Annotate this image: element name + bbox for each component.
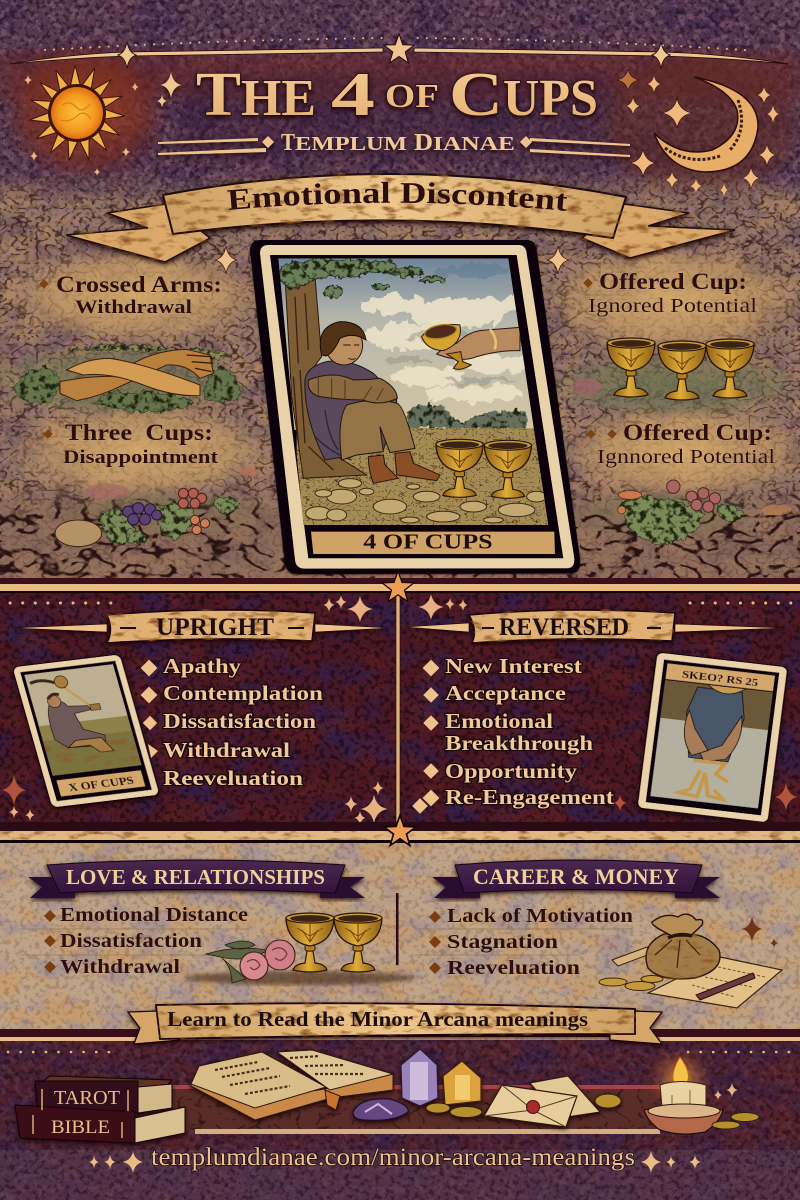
illustration: three golden cups — [607, 338, 754, 400]
main tarot card: 4 OF CUPS — [363, 531, 493, 553]
illustration: crossed arms in foliage — [13, 346, 240, 412]
subtitle: Templum Dianae: EMPLUM — [295, 133, 407, 155]
title: T — [196, 61, 241, 129]
career list: Lack of Motivation — [447, 905, 633, 927]
star and central rule — [382, 571, 414, 822]
reversed list: New Interest — [445, 654, 582, 678]
panel: tableau ground — [0, 170, 800, 582]
reversed list: Breakthrough — [445, 731, 593, 755]
love banner: LOVE & RELATIONSHIPS — [66, 865, 325, 889]
upright list: Reeveluation — [163, 766, 303, 790]
icon: coin bag, coins, letter and pen — [599, 914, 782, 1008]
career banner — [432, 860, 720, 898]
reversed list: Emotional — [445, 709, 553, 733]
icon: crystals and coins — [353, 1049, 621, 1120]
icon: cups and roses — [185, 913, 415, 985]
footer url: templumdianae.com/minor-arcana-meanings — [151, 1144, 635, 1171]
decorative sparkles near card — [215, 246, 569, 274]
reversed list: Opportunity — [445, 759, 578, 783]
panel: lower dark background — [0, 1029, 800, 1200]
icon: sealed envelope — [484, 1076, 600, 1127]
icon: sun — [24, 65, 139, 176]
panel: love and relationships — [20, 860, 415, 985]
upright list: Apathy — [163, 654, 242, 678]
upright list: Withdrawal — [163, 738, 290, 762]
upright list — [141, 654, 323, 790]
shelf with bricks — [170, 1085, 660, 1134]
text: Crossed Arms: Withdrawal — [75, 297, 192, 318]
upright list: Contemplation — [163, 681, 323, 705]
background: parchment purple — [0, 0, 800, 600]
text: Offered Cup lower — [586, 420, 776, 468]
icon: candle — [644, 1047, 759, 1134]
banner: learn to read: Learn to Read the Minor Arcana meanings — [167, 1007, 588, 1031]
small cups on card — [436, 439, 531, 498]
reversed small card: SKEO? RS 25 — [681, 668, 759, 689]
upright small card: X OF CUPS — [67, 774, 136, 794]
main tarot card — [250, 240, 580, 574]
panel: light lower section — [0, 843, 800, 1040]
text: Offered Cup top: Ignored Potential — [588, 295, 758, 317]
reversed list: Acceptance — [445, 681, 566, 705]
panel: career and money — [415, 860, 782, 1008]
text: Offered Cup lower: Ignnored Potential — [597, 446, 776, 468]
top ornamental rule — [10, 34, 788, 68]
banner: Emotional Discontent — [64, 172, 737, 268]
career list — [415, 905, 633, 979]
subtitle: Templum Dianae — [158, 130, 630, 157]
title — [157, 61, 598, 129]
icon: tarot and bible books: TAROT — [54, 1087, 120, 1109]
text: Three Cups: Disappointment — [63, 447, 219, 468]
text: Three Cups: Three Cups: — [65, 420, 213, 445]
title: C — [449, 61, 503, 129]
subtitle: Templum Dianae: IANAE — [433, 133, 515, 155]
text: Offered Cup lower: Offered Cup: — [623, 420, 772, 445]
icon: tarot and bible books: BIBLE — [51, 1117, 110, 1138]
card illustration — [273, 257, 557, 528]
star lower divider — [384, 815, 416, 846]
text: Crossed Arms — [39, 272, 222, 318]
panel: reversed — [405, 594, 797, 823]
illustration: berries right — [572, 378, 792, 545]
subtitle: Templum Dianae: D — [414, 130, 433, 156]
icon: crescent moon and stars — [617, 69, 779, 199]
upright list: Dissatisfaction — [163, 709, 316, 733]
title: UPS — [503, 70, 598, 127]
icon: open book — [191, 1050, 393, 1120]
reversed banner — [405, 610, 785, 643]
career banner: CAREER & MONEY — [473, 864, 679, 889]
panel: upright — [2, 595, 390, 825]
upright small card — [12, 654, 160, 808]
upright banner: UPRIGHT — [156, 614, 274, 641]
text: Crossed Arms: Crossed Arms: — [56, 272, 222, 297]
love list: Emotional Distance — [60, 904, 248, 926]
reversed small card — [637, 652, 788, 823]
icon: tarot and bible books — [15, 1076, 185, 1143]
upright banner — [13, 610, 390, 643]
career list: Stagnation — [447, 931, 558, 953]
section divider lower — [0, 822, 800, 843]
reversed list: Re-Engagement — [445, 785, 614, 809]
love banner — [28, 860, 365, 898]
text: Three Cups — [43, 420, 219, 468]
reversed list — [412, 654, 614, 814]
reversed banner: REVERSED — [499, 614, 629, 641]
panel: maroon background — [0, 593, 800, 829]
career list: Reeveluation — [447, 957, 580, 979]
love list — [20, 904, 250, 978]
love list: Withdrawal — [60, 956, 181, 978]
banner: Emotional Discontent: Emotional Discontent — [227, 182, 568, 211]
title: OF — [385, 78, 439, 115]
section divider upper — [0, 578, 800, 598]
title: 4 — [331, 61, 375, 129]
illustration: berries left — [55, 467, 258, 547]
text: Offered Cup top: Offered Cup: — [599, 269, 747, 294]
subtitle: Templum Dianae: T — [281, 130, 295, 156]
title: HE — [241, 70, 316, 127]
text: Offered Cup top — [583, 269, 758, 317]
footer url — [89, 1144, 701, 1173]
banner: learn to read — [128, 1003, 662, 1044]
love list: Dissatisfaction — [60, 930, 202, 952]
